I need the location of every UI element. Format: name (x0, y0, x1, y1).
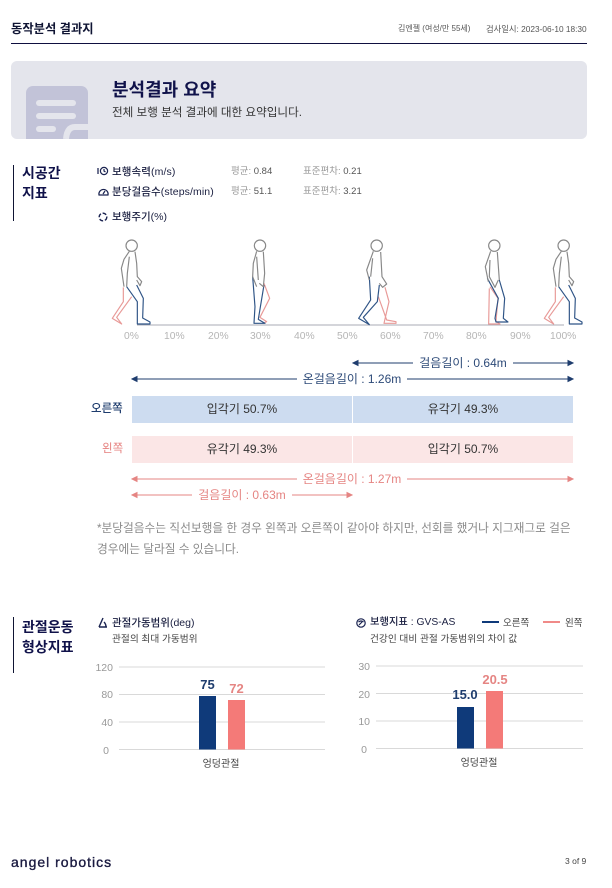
bar chart: gait index: 10 (358, 716, 370, 728)
logo: angel robotics (11, 854, 112, 870)
bar chart: gait index: 15.0 (452, 687, 478, 702)
patient info: 김엔젤 (여성/만 55세) (398, 24, 470, 33)
legend: 왼쪽 (565, 618, 583, 629)
metric: cadence SD: 표준편차: 3.21 (303, 186, 362, 197)
banner heading: 분석결과 요약 (112, 80, 216, 100)
exam date: 검사일시: 2023-06-10 18:30 (486, 24, 587, 34)
gait cycle axis labels: 20% (208, 331, 229, 342)
chart heading: gait index: 보행지표 : GVS-AS (370, 617, 455, 628)
swing bar left (132, 436, 352, 463)
figure: 100% (544, 240, 582, 324)
bar chart: gait index: 30 (358, 661, 370, 673)
row label: right: 오른쪽 (91, 403, 123, 415)
figure: 60% (359, 240, 396, 325)
bar chart: range of motion: 120 (95, 662, 113, 674)
bar chart: gait index: 20.5 (482, 672, 508, 687)
step length left: 걸음길이 : 0.63m (198, 488, 286, 502)
swing bar left: 유각기 49.3% (207, 442, 277, 456)
swing bar right: 유각기 49.3% (428, 402, 498, 416)
gait cycle axis labels: 60% (380, 331, 401, 342)
legend: 오른쪽 (503, 618, 529, 629)
gait cycle axis labels: 30% (250, 331, 271, 342)
section heading: spatiotemporal: 지표 (22, 185, 48, 201)
bar chart: gait index: 20 (358, 689, 370, 701)
header rule (11, 43, 587, 44)
bar chart: gait index: 엉덩관절 (461, 756, 497, 769)
footnote (97, 522, 571, 556)
stride length right: 온걸음길이 : 1.26m (303, 372, 401, 386)
figure: 0% (112, 240, 150, 324)
page title: 동작분석 결과지 (11, 22, 94, 36)
bar chart: range of motion: 72 (229, 681, 244, 696)
section heading: joint kinematics (13, 617, 84, 673)
page number: 3 of 9 (565, 856, 586, 866)
bar chart: range of motion: 75 (200, 677, 215, 692)
gait cycle axis labels: 80% (466, 331, 487, 342)
footnote: 경우에는 달라질 수 있습니다. (97, 543, 239, 556)
metric: cadence mean: 평균: 51.1 (231, 186, 272, 197)
chart heading: range of motion: 관절가동범위(deg) (112, 617, 194, 629)
metric: walking speed mean: 평균: 0.84 (231, 166, 272, 177)
swing bar right (353, 396, 573, 423)
stance bar left (353, 436, 573, 463)
figure: 80% (485, 240, 508, 324)
stride length left: 온걸음길이 : 1.27m (303, 472, 401, 486)
banner description: 전체 보행 분석 결과에 대한 요약입니다. (112, 106, 302, 119)
stance bar right: 입각기 50.7% (207, 402, 277, 416)
section heading: joint kinematics: 관절운동 (22, 619, 74, 635)
gait cycle axis labels: 40% (294, 331, 315, 342)
icon: report document (26, 86, 88, 139)
step length right: 걸음길이 : 0.64m (419, 356, 507, 370)
section heading: joint kinematics: 형상지표 (22, 639, 74, 655)
bar chart: range of motion: 40 (101, 717, 113, 729)
metric: walking speed SD: 표준편차: 0.21 (303, 166, 362, 177)
gait cycle axis labels: 70% (423, 331, 444, 342)
bar chart: range of motion: 엉덩관절 (203, 757, 239, 770)
stance bar right (132, 396, 352, 423)
section heading: spatiotemporal (13, 165, 74, 221)
gait cycle axis labels: 100% (550, 331, 576, 342)
stance bar left: 입각기 50.7% (428, 442, 498, 456)
metric: gait cycle label: 보행주기(%) (112, 211, 167, 223)
gait cycle axis labels: 10% (164, 331, 185, 342)
metric: cadence label: 분당걸음수(steps/min) (112, 186, 214, 198)
footnote: *분당걸음수는 직선보행을 한 경우 왼쪽과 오른쪽이 같아야 하지만, 선회를 했거나 지그재그로 걸은 (97, 522, 571, 535)
chart description: range of motion: 관절의 최대 가동범위 (112, 634, 198, 645)
bar chart: gait index: 0 (361, 744, 367, 756)
row label: left: 왼쪽 (102, 443, 123, 455)
section heading: spatiotemporal: 시공간 (22, 165, 61, 181)
gait cycle axis labels: 50% (337, 331, 358, 342)
gait cycle axis labels (124, 331, 576, 342)
metric: walking speed label: 보행속력(m/s) (112, 166, 175, 178)
gait cycle axis labels: 0% (124, 331, 139, 342)
bar chart: range of motion: 0 (103, 745, 109, 757)
chart description: gait index: 건강인 대비 관절 가동범위의 차이 값 (370, 634, 517, 645)
panel: summary banner (11, 61, 587, 139)
gait cycle axis labels: 90% (510, 331, 531, 342)
figure: 30% (253, 240, 270, 323)
bar chart: range of motion: 80 (101, 689, 113, 701)
